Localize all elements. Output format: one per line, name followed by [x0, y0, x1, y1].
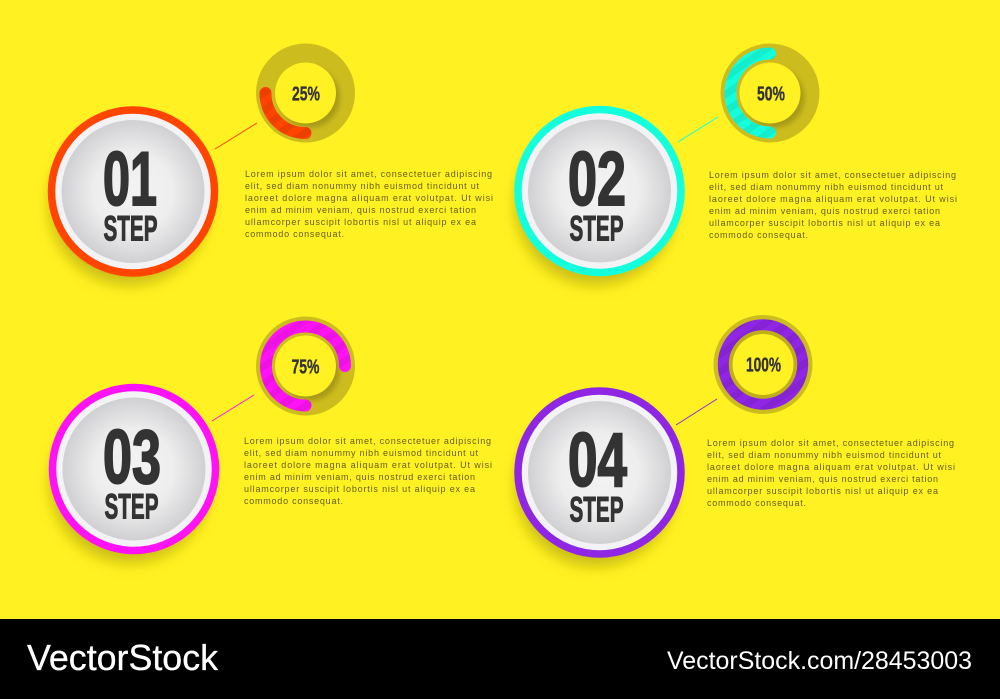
text block 03: ullamcorper suscipit lobortis nisl ut aliquip ex ea	[244, 484, 475, 494]
text block 04: commodo consequat.	[707, 498, 806, 508]
main circle 02: 02	[568, 137, 626, 222]
text block 02: laoreet dolore magna aliquam erat volutpat. Ut wisi	[709, 194, 957, 204]
text block 02: enim ad minim veniam, quis nostrud exerci tation	[709, 206, 940, 216]
progress donut 75%: 75%	[292, 356, 320, 378]
main circle 04	[516, 391, 681, 566]
text block 02: Lorem ipsum dolor sit amet, consectetuer adipiscing	[709, 170, 956, 180]
text block 01: commodo consequat.	[245, 229, 344, 239]
text block 03: Lorem ipsum dolor sit amet, consectetuer adipiscing	[244, 436, 491, 446]
panel: step 02	[516, 44, 957, 285]
text block 01: enim ad minim veniam, quis nostrud exerci tation	[245, 205, 476, 215]
main circle 03	[50, 388, 216, 563]
panel: step 04	[516, 315, 955, 566]
main circle 03: 03	[103, 415, 161, 500]
text block 01: elit, sed diam nonummy nibh euismod tincidunt ut	[245, 181, 479, 191]
text block 02: ullamcorper suscipit lobortis nisl ut aliquip ex ea	[709, 218, 940, 228]
footer image id: VectorStock.com/28453003	[667, 647, 972, 675]
main circle 01: STEP	[104, 210, 158, 248]
text block 04: enim ad minim veniam, quis nostrud exerci tation	[707, 474, 938, 484]
text block 04: elit, sed diam nonummy nibh euismod tincidunt ut	[707, 450, 941, 460]
progress donut 75%	[256, 316, 355, 416]
footer bar	[0, 619, 1000, 699]
progress donut 25%	[256, 44, 355, 142]
connector line 03	[212, 395, 254, 421]
text block 03: laoreet dolore magna aliquam erat volutpat. Ut wisi	[244, 460, 492, 470]
connector line 01	[215, 123, 257, 149]
main circle 02: STEP	[570, 210, 624, 248]
text block 02	[709, 170, 957, 240]
connector line 04	[676, 399, 717, 425]
progress donut 100%: 100%	[746, 354, 781, 376]
main circle 02	[516, 110, 681, 285]
text block 03: enim ad minim veniam, quis nostrud exerci tation	[244, 472, 475, 482]
text block 03: commodo consequat.	[244, 496, 343, 506]
main circle 04: 04	[568, 418, 627, 503]
text block 03: elit, sed diam nonummy nibh euismod tincidunt ut	[244, 448, 478, 458]
text block 04	[707, 438, 955, 508]
main circle 04: STEP	[570, 490, 624, 530]
text block 01: ullamcorper suscipit lobortis nisl ut aliquip ex ea	[245, 217, 476, 227]
text block 02: commodo consequat.	[709, 230, 808, 240]
text block 02: elit, sed diam nonummy nibh euismod tincidunt ut	[709, 182, 943, 192]
connector line 02	[678, 117, 718, 142]
text block 01	[245, 169, 493, 239]
main circle 03: STEP	[104, 488, 158, 526]
text block 04: Lorem ipsum dolor sit amet, consectetuer adipiscing	[707, 438, 954, 448]
footer logo: VectorStock	[27, 637, 219, 678]
panel: step 01	[49, 44, 493, 285]
text block 04: ullamcorper suscipit lobortis nisl ut aliquip ex ea	[707, 486, 938, 496]
main circle 01: 01	[103, 137, 157, 222]
progress donut 50%: 50%	[757, 84, 785, 106]
progress donut 100%	[714, 315, 812, 414]
panel: step 03	[50, 316, 492, 563]
progress donut 25%: 25%	[292, 84, 320, 106]
text block 03	[244, 436, 492, 506]
main circle 01	[49, 110, 214, 285]
text block 04: laoreet dolore magna aliquam erat volutpat. Ut wisi	[707, 462, 955, 472]
text block 01: laoreet dolore magna aliquam erat volutpat. Ut wisi	[245, 193, 493, 203]
progress donut 50%	[720, 44, 820, 142]
text block 01: Lorem ipsum dolor sit amet, consectetuer adipiscing	[245, 169, 492, 179]
